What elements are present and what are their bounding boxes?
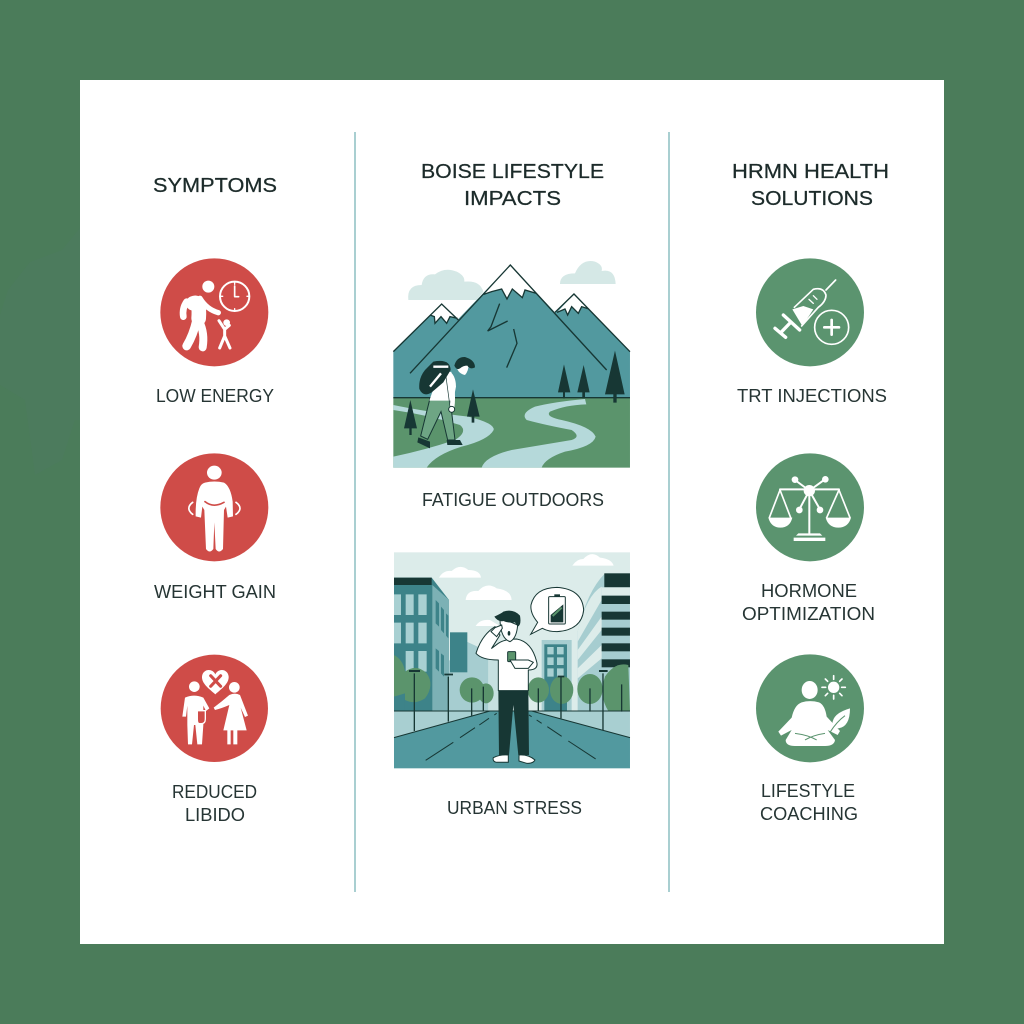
panel: Boise lifestyle impacts [393, 161, 630, 818]
building: left [394, 578, 449, 711]
panel: HRMN Health solutions [732, 161, 889, 824]
icon: weight gain [160, 453, 268, 561]
building: right [578, 573, 630, 711]
figure: tired hiker [417, 357, 475, 448]
label: coaching: COACHING [760, 804, 858, 824]
heading line 1: BOISE LIFESTYLE [421, 161, 604, 183]
label: optimization: OPTIMIZATION [742, 604, 875, 624]
label: TRT injections: TRT INJECTIONS [737, 386, 887, 406]
label: libido: LIBIDO [185, 805, 245, 825]
label: weight gain: WEIGHT GAIN [154, 582, 276, 602]
figure: stressed man [476, 611, 537, 763]
icon: reduced libido [161, 655, 268, 762]
label: urban stress: URBAN STRESS [447, 798, 582, 818]
speech bubble with low battery [531, 587, 584, 634]
heading line 2: IMPACTS [464, 188, 561, 210]
icon: meditation [756, 654, 864, 762]
icon: hormone balance scale [756, 453, 864, 561]
label: low energy: LOW ENERGY [156, 386, 274, 406]
illustration: urban stress [394, 552, 630, 768]
heading: symptoms: SYMPTOMS [153, 175, 277, 197]
heading line 1: HRMN HEALTH [732, 161, 889, 183]
building: centre right [542, 640, 572, 712]
label: lifestyle: LIFESTYLE [761, 781, 855, 801]
heading line 2: SOLUTIONS [751, 188, 873, 210]
label: hormone: HORMONE [761, 581, 857, 601]
label: reduced: REDUCED [172, 782, 257, 802]
icon: low energy [160, 258, 268, 366]
panel: symptoms [153, 175, 277, 825]
white card [80, 80, 944, 944]
illustration: fatigue outdoors [393, 261, 630, 468]
icon: syringe [756, 258, 864, 366]
label: fatigue outdoors: FATIGUE OUTDOORS [422, 490, 604, 510]
